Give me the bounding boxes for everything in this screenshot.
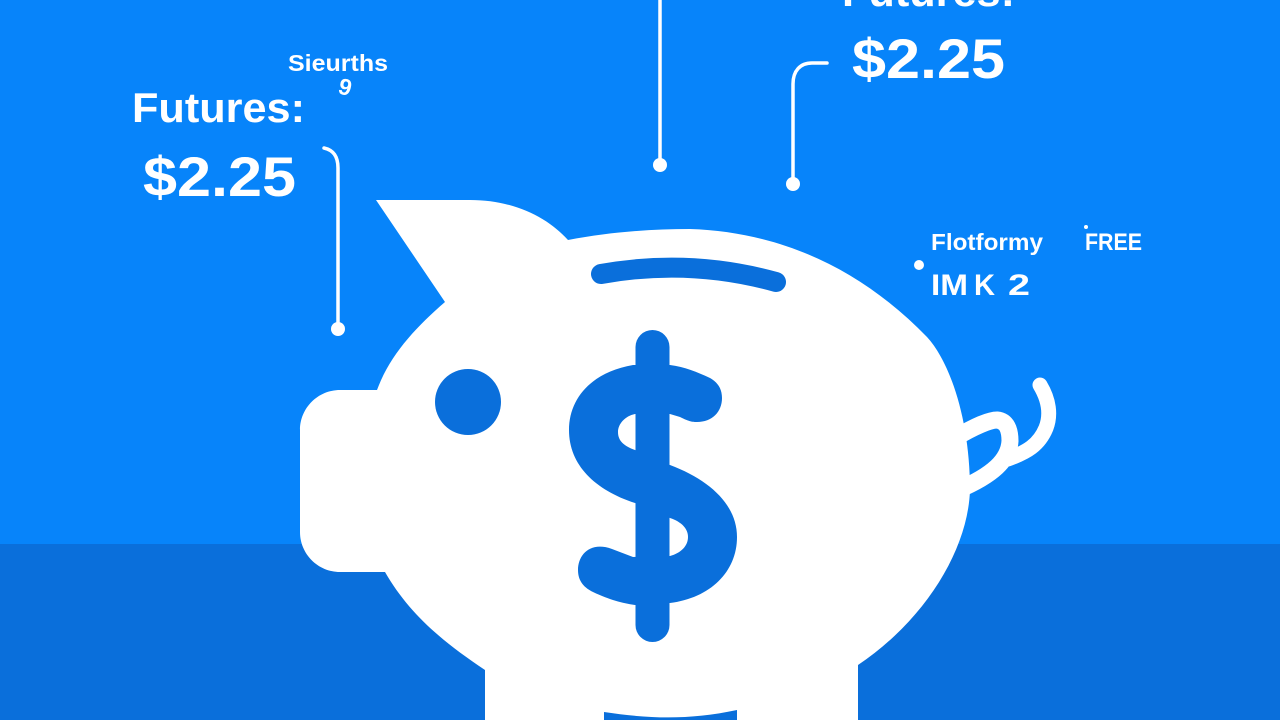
label: platform: Flotformy <box>931 229 1043 255</box>
value dot <box>914 260 924 270</box>
label: value digit: 2 <box>1008 269 1030 302</box>
free dot <box>1084 225 1088 229</box>
value: top price: $2.25 <box>852 27 1005 90</box>
label: futures: Futures: <box>132 84 305 131</box>
pig body <box>300 200 970 720</box>
icon: dollar sign <box>569 330 737 642</box>
pig tail <box>955 385 1049 490</box>
label: free: FREE <box>1085 229 1142 256</box>
connector: center <box>653 0 667 172</box>
connector dot: left <box>331 322 345 336</box>
callout: platform fee <box>914 225 1142 302</box>
connector: right <box>793 63 827 184</box>
callout: left futures price <box>132 84 345 336</box>
pig eye <box>435 369 501 435</box>
small label glyph: 9 <box>336 73 355 101</box>
center line <box>658 0 662 165</box>
dollar bar <box>636 330 670 642</box>
callout: right futures price <box>786 0 1015 191</box>
connector dot: right <box>786 177 800 191</box>
icon: piggy bank <box>300 200 1049 720</box>
small label text: Sieurths <box>288 50 388 76</box>
dollar s curve <box>569 365 737 605</box>
label: value letter: K <box>974 269 995 302</box>
value: left price: $2.25 <box>143 145 296 208</box>
center dot <box>653 158 667 172</box>
label: value: IM <box>931 269 968 302</box>
connector: left <box>324 148 338 329</box>
callout: small garbled label <box>288 50 388 101</box>
coin slot <box>601 268 776 282</box>
floor band <box>0 544 1280 720</box>
